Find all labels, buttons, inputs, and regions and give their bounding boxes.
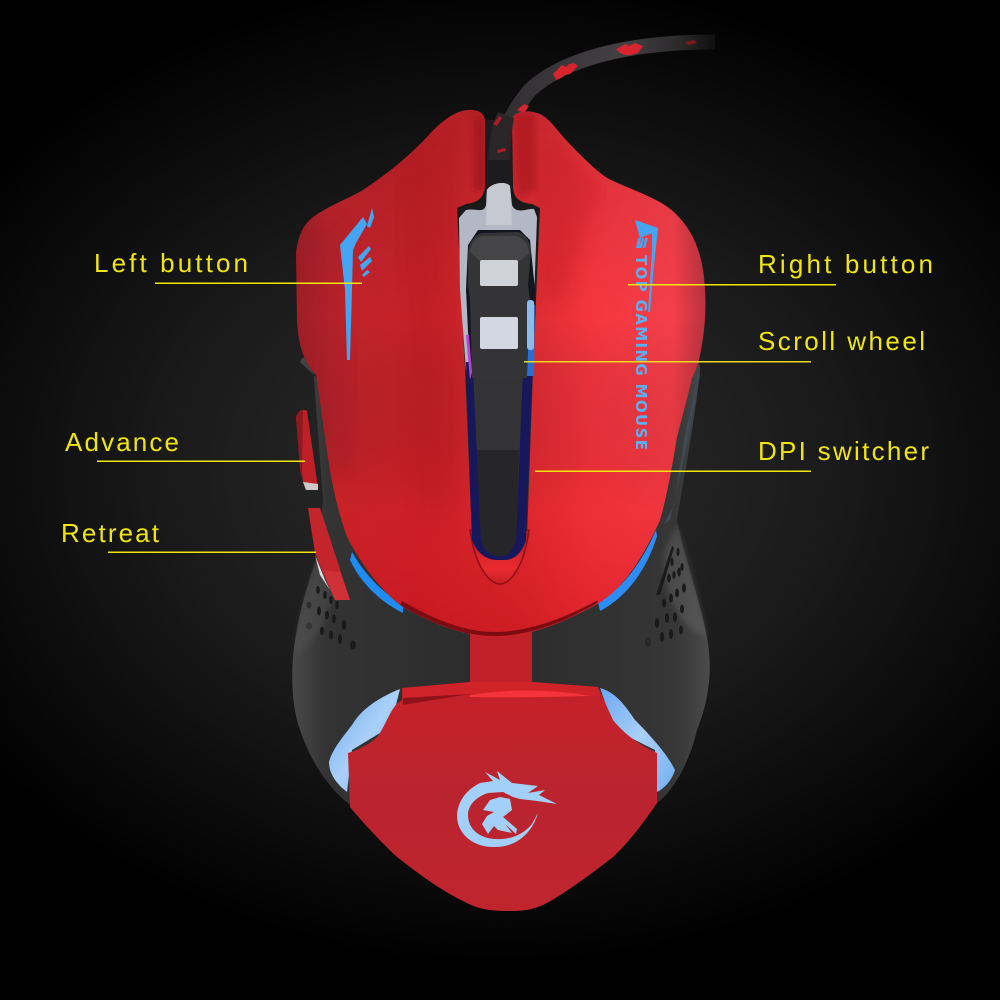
wheel window lower xyxy=(480,317,518,349)
callout: right button: Right button xyxy=(758,249,933,279)
callout: DPI switcher: DPI switcher xyxy=(758,436,929,466)
side button: retreat xyxy=(308,508,350,600)
palm rest xyxy=(348,682,657,911)
grip dots: right xyxy=(645,546,686,647)
speckled highlight: right grip xyxy=(664,525,707,637)
slot edge glow: left xyxy=(466,335,472,380)
palm highlight band xyxy=(403,682,600,698)
callout: advance: Advance xyxy=(65,427,179,457)
translucent grey housing xyxy=(459,183,537,370)
callout: scroll wheel: Scroll wheel xyxy=(758,326,925,356)
black lower body xyxy=(292,357,710,840)
DPI strip xyxy=(473,370,523,556)
slot edge glow: right xyxy=(527,300,535,376)
dragon logo xyxy=(457,771,557,847)
product text: TOP GAMING MOUSE xyxy=(632,255,650,450)
blue strip: left xyxy=(350,552,403,613)
top shell xyxy=(290,100,710,645)
right side bluish strip xyxy=(664,372,700,524)
callout: retreat: Retreat xyxy=(61,518,160,548)
speckled highlight: left grip xyxy=(294,560,333,657)
dark cavity xyxy=(466,230,535,372)
slot interior xyxy=(459,112,537,584)
red stem xyxy=(470,630,532,690)
cable channel xyxy=(486,120,512,190)
callout: left button: Left button xyxy=(94,248,248,278)
pit below the strip xyxy=(470,530,529,584)
left button logo xyxy=(340,208,374,360)
cable xyxy=(493,40,715,200)
mouse xyxy=(290,40,715,911)
lower strip recess xyxy=(466,362,533,560)
wheel window upper xyxy=(480,260,518,286)
blue glow: left xyxy=(329,689,400,792)
blue strip: right xyxy=(598,530,657,611)
scroll wheel xyxy=(468,232,531,378)
right button logo xyxy=(635,220,658,312)
grip dots: left xyxy=(306,586,356,650)
side button: advance xyxy=(296,410,318,490)
blue glow: right xyxy=(600,688,675,792)
